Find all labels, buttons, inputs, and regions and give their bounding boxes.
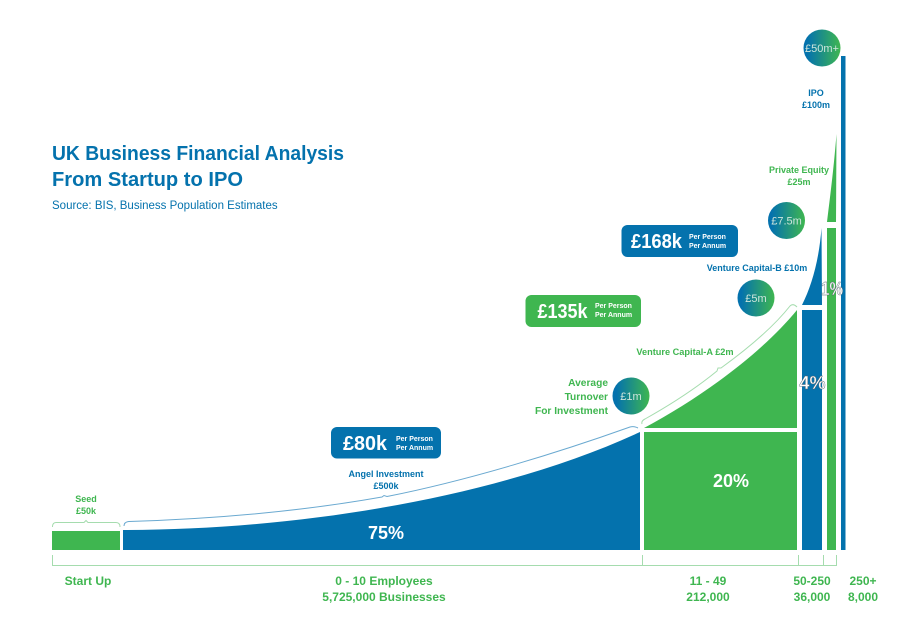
axis label: 11-49: 11 - 49	[690, 574, 727, 588]
label: private equity: £25m	[787, 177, 811, 187]
axis label: 250+	[848, 574, 878, 604]
label: seed: Seed	[75, 494, 97, 504]
area: 250+ curve	[827, 134, 836, 222]
title: From Startup to IPO	[52, 169, 243, 191]
badge: 135k: Per Person	[595, 303, 632, 310]
label: average turnover	[535, 378, 609, 417]
badge: 135k: Per Annum	[595, 312, 632, 319]
circle: 7.5m	[768, 202, 805, 239]
label: IPO: IPO	[808, 88, 824, 98]
axis label: 50-250	[793, 574, 831, 604]
axis label: start up: Start Up	[65, 574, 111, 588]
percent: 20: 20%	[713, 471, 749, 491]
source note: Source: BIS, Business Population Estimates	[52, 200, 278, 212]
label: IPO: £100m	[802, 100, 830, 110]
area: 0-10 employees	[123, 432, 640, 550]
circle: 5m	[738, 280, 774, 316]
label: seed	[75, 494, 97, 516]
circle: 5m: £5m	[745, 293, 767, 305]
circle: 1m	[612, 378, 650, 414]
axis label: 250+: 250+	[849, 574, 877, 588]
bracket: venture capital A	[642, 305, 797, 424]
title: UK Business Financial Analysis	[52, 143, 344, 165]
badge: 168k: Per Person	[689, 234, 726, 241]
circle: 1m: £1m	[620, 391, 642, 403]
badge: 168k: £168k	[631, 231, 683, 253]
axis label: 0-10 employees	[322, 574, 446, 604]
title	[52, 143, 344, 191]
label: average turnover: For Investment	[535, 406, 609, 417]
label: IPO	[802, 88, 830, 110]
percent: 75: 75%	[368, 523, 404, 543]
bar: start up seed	[52, 531, 120, 550]
circle: 7.5m: £7.5m	[771, 216, 802, 228]
area: 50-250 curve	[802, 228, 822, 305]
bracket: seed	[52, 520, 120, 527]
circle: 50m+: £50m+	[805, 43, 839, 55]
axis label: 50-250: 50-250	[793, 574, 831, 588]
block: 11-49 lower	[644, 432, 797, 550]
axis label: 11-49: 212,000	[686, 590, 730, 604]
circle: 50m+	[804, 30, 840, 66]
percent: 4: 4%	[799, 373, 826, 393]
label: private equity: Private Equity	[769, 165, 829, 175]
label: average turnover: Turnover	[565, 392, 608, 403]
badge: 135k: £135k	[538, 301, 588, 323]
axis bracket	[52, 555, 836, 566]
bar: 250+ lower	[827, 228, 836, 550]
badge: 80k: £80k	[343, 433, 388, 455]
label: angel investment	[348, 469, 424, 491]
label: private equity	[769, 165, 829, 187]
badge: 80k: Per Annum	[396, 445, 433, 452]
axis label: 50-250: 36,000	[794, 590, 831, 604]
bracket: angel investment	[124, 427, 638, 526]
label: angel investment: Angel Investment	[348, 469, 424, 479]
label: venture capital B: Venture Capital-B £10m	[707, 263, 807, 273]
badge: 168k	[622, 225, 738, 257]
axis label: 250+: 8,000	[848, 590, 878, 604]
bar: 50-250 lower	[802, 310, 822, 550]
badge: 80k	[331, 427, 441, 458]
label: average turnover: Average	[568, 378, 608, 389]
bar: IPO	[841, 56, 846, 550]
label: seed: £50k	[76, 506, 97, 516]
badge: 135k	[526, 295, 641, 327]
axis label: 11-49	[686, 574, 730, 604]
axis label: 0-10 employees: 5,725,000 Businesses	[322, 590, 446, 604]
axis label: 0-10 employees: 0 - 10 Employees	[335, 574, 433, 588]
percent: 1: 1%	[821, 279, 843, 299]
badge: 80k: Per Person	[396, 436, 433, 443]
label: venture capital A: Venture Capital-A £2m	[636, 347, 734, 357]
badge: 168k: Per Annum	[689, 243, 726, 250]
label: angel investment: £500k	[373, 481, 400, 491]
area: 11-49 curve	[644, 310, 797, 428]
